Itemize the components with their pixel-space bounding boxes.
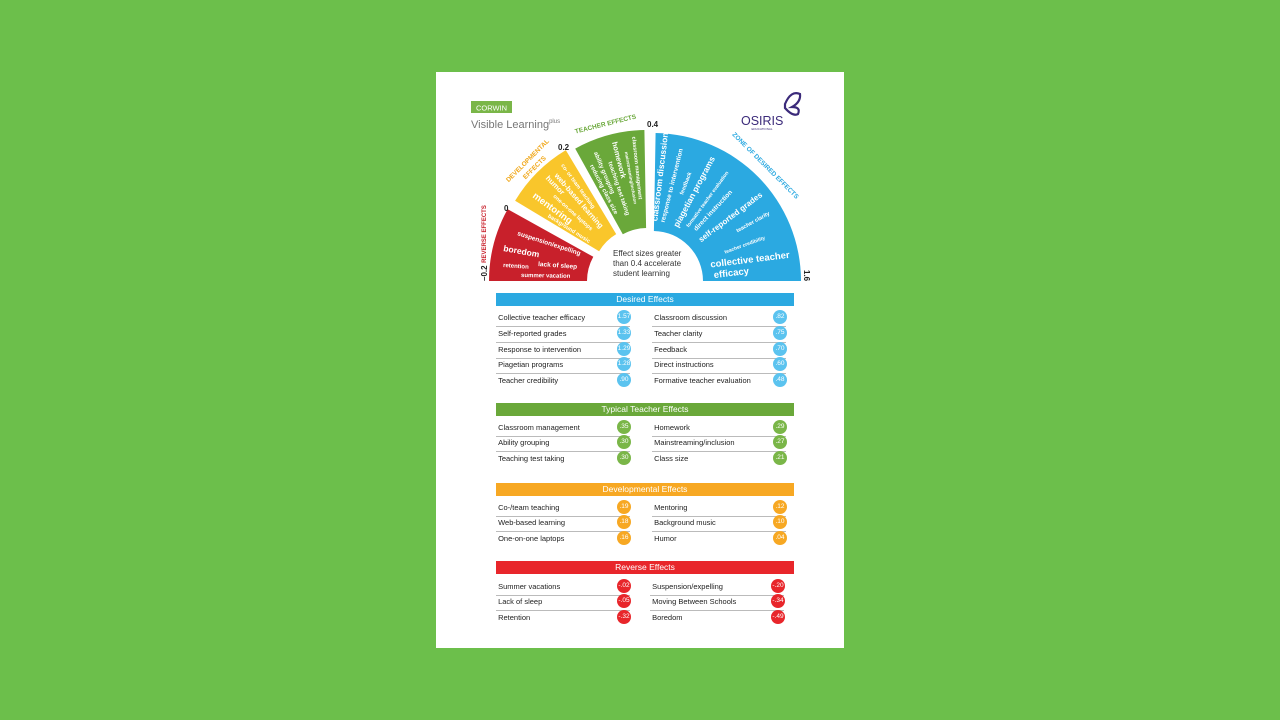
- text: .30: [619, 438, 629, 445]
- text: Teaching test taking: [498, 454, 564, 463]
- text: Desired Effects: [616, 294, 674, 304]
- text: Reverse Effects: [615, 562, 675, 572]
- labels: ticks: –0.2: [480, 265, 489, 281]
- text: .29: [775, 423, 785, 430]
- logo: osiris: OSIRIS: [741, 114, 783, 128]
- text: Co-/team teaching: [498, 503, 559, 512]
- text: -.05: [618, 597, 630, 604]
- text: Summer vacations: [498, 582, 560, 591]
- center text: than 0.4 accelerate: [613, 259, 682, 268]
- text: 1.33: [618, 329, 630, 336]
- page: document: [436, 72, 844, 648]
- segment: teacher (green): ability grouping: [592, 151, 615, 195]
- labels: ticks: 0.2: [558, 143, 570, 152]
- segment: desired (blue): self-reported grades: [697, 190, 765, 244]
- labels: zones: TEACHER EFFECTS: [574, 113, 638, 136]
- center text: [613, 249, 682, 278]
- text: Classroom management: [498, 423, 580, 432]
- text: Direct instructions: [654, 360, 714, 369]
- text: Teacher credibility: [498, 376, 558, 385]
- segment: desired (blue): [649, 132, 801, 281]
- segment: developmental (yellow): [515, 150, 616, 251]
- text: Self-reported grades: [498, 329, 566, 338]
- segment: developmental (yellow): co- or team teaching: [559, 163, 596, 210]
- segment: desired (blue): piagetian programs: [671, 154, 717, 229]
- segment: teacher (green): teaching test taking: [606, 161, 630, 217]
- text: Homework: [654, 423, 690, 432]
- panel: teacher effects: [496, 403, 794, 465]
- panel: desired effects: [496, 293, 794, 387]
- text: Piagetian programs: [498, 360, 563, 369]
- text: -.32: [618, 613, 630, 620]
- text: Retention: [498, 613, 530, 622]
- segment: reverse (red): lack of sleep: [538, 261, 577, 271]
- segment: desired (blue): response to intervention: [660, 148, 685, 223]
- text: 1.28: [618, 360, 630, 367]
- text: .04: [775, 534, 785, 541]
- text: Response to intervention: [498, 345, 581, 354]
- text: .75: [775, 329, 785, 336]
- segment: reverse (red): [489, 209, 593, 281]
- text: .30: [619, 454, 629, 461]
- text: 1.29: [618, 345, 630, 352]
- text: 1.57: [618, 313, 630, 320]
- segment: desired (blue): feedback: [679, 171, 694, 196]
- segment: desired (blue): classroom discussion: [649, 132, 670, 222]
- segment: reverse (red): retention: [503, 263, 529, 271]
- segment: desired (blue): teacher clarity: [736, 210, 772, 234]
- text: -.34: [772, 597, 784, 604]
- text: Classroom discussion: [654, 313, 727, 322]
- labels: zones: [482, 113, 800, 263]
- text: .21: [775, 454, 785, 461]
- labels: ticks: 0: [504, 204, 509, 213]
- text: Feedback: [654, 345, 687, 354]
- segment: desired (blue): collective teacher: [710, 250, 791, 270]
- segment: developmental (yellow): one-on-one laptops: [551, 194, 593, 232]
- text: -.02: [618, 582, 630, 589]
- segment: desired (blue): efficacy: [713, 266, 750, 281]
- segment: teacher (green): mainstreaming/inclusion: [624, 151, 638, 205]
- panel: developmental effects: [496, 483, 794, 545]
- text: .60: [775, 360, 785, 367]
- labels: zones: REVERSE EFFECTS: [482, 205, 488, 263]
- text: -.49: [772, 613, 784, 620]
- segment: teacher (green): classroom management: [630, 136, 643, 200]
- segment: reverse (red): summer vacation: [521, 273, 571, 280]
- segment: developmental (yellow): background music: [546, 213, 591, 245]
- text: Background music: [654, 518, 716, 527]
- labels: ticks: [480, 120, 811, 282]
- text: .18: [619, 518, 629, 525]
- labels: ticks: 1.6: [802, 270, 811, 282]
- logo: corwin: [471, 101, 512, 113]
- segment: teacher (green): reducing class size: [588, 164, 619, 216]
- center text: student learning: [613, 269, 670, 278]
- text: One-on-one laptops: [498, 534, 564, 543]
- text: .82: [775, 313, 785, 320]
- text: Developmental Effects: [603, 484, 687, 494]
- text: Web-based learning: [498, 518, 565, 527]
- text: -.20: [772, 582, 784, 589]
- segment: desired (blue): formative teacher evaluation: [686, 170, 730, 229]
- logo: visible learning: Visible Learning: [471, 119, 549, 131]
- segment: reverse (red): boredom: [503, 243, 541, 259]
- text: .10: [775, 518, 785, 525]
- text: .90: [619, 376, 629, 383]
- labels: zones: EFFECTS: [522, 155, 548, 181]
- text: Teacher clarity: [654, 329, 702, 338]
- text: .48: [775, 376, 785, 383]
- text: .35: [619, 423, 629, 430]
- panel: reverse effects: [496, 561, 794, 624]
- segment: developmental (yellow): web-based learning: [552, 171, 606, 230]
- text: Formative teacher evaluation: [654, 376, 751, 385]
- text: Lack of sleep: [498, 597, 542, 606]
- text: .16: [619, 534, 629, 541]
- segment: reverse (red): suspension/expelling: [516, 230, 581, 257]
- labels: ticks: 0.4: [647, 120, 659, 129]
- logo: osiris: [741, 93, 800, 131]
- text: Suspension/expelling: [652, 582, 723, 591]
- segment: developmental (yellow): mentoring: [530, 191, 574, 227]
- center text: Effect sizes greater: [613, 249, 682, 258]
- text: .12: [775, 503, 785, 510]
- segment: desired (blue): teacher credibility: [724, 235, 766, 256]
- text: Class size: [654, 454, 688, 463]
- segment: developmental (yellow): humor: [544, 174, 567, 197]
- segment: desired (blue): direct instruction: [693, 189, 734, 233]
- text: Mainstreaming/inclusion: [654, 438, 735, 447]
- segment: teacher (green): homework: [610, 141, 628, 180]
- text: Moving Between Schools: [652, 597, 736, 606]
- logo: corwin: CORWIN: [476, 104, 507, 112]
- logo: osiris: EDUCATIONAL: [751, 127, 773, 131]
- text: .27: [775, 438, 785, 445]
- logo: visible learning: plus: [549, 119, 560, 125]
- text: .19: [619, 503, 629, 510]
- text: Mentoring: [654, 503, 687, 512]
- labels: zones: DEVELOPMENTAL: [505, 138, 551, 184]
- text: .70: [775, 345, 785, 352]
- segment: teacher (green): [575, 130, 646, 234]
- text: Collective teacher efficacy: [498, 313, 585, 322]
- labels: zones: ZONE OF DESIRED EFFECTS: [730, 131, 800, 201]
- text: Ability grouping: [498, 438, 549, 447]
- text: Boredom: [652, 613, 683, 622]
- text: Typical Teacher Effects: [601, 404, 689, 414]
- text: Humor: [654, 534, 677, 543]
